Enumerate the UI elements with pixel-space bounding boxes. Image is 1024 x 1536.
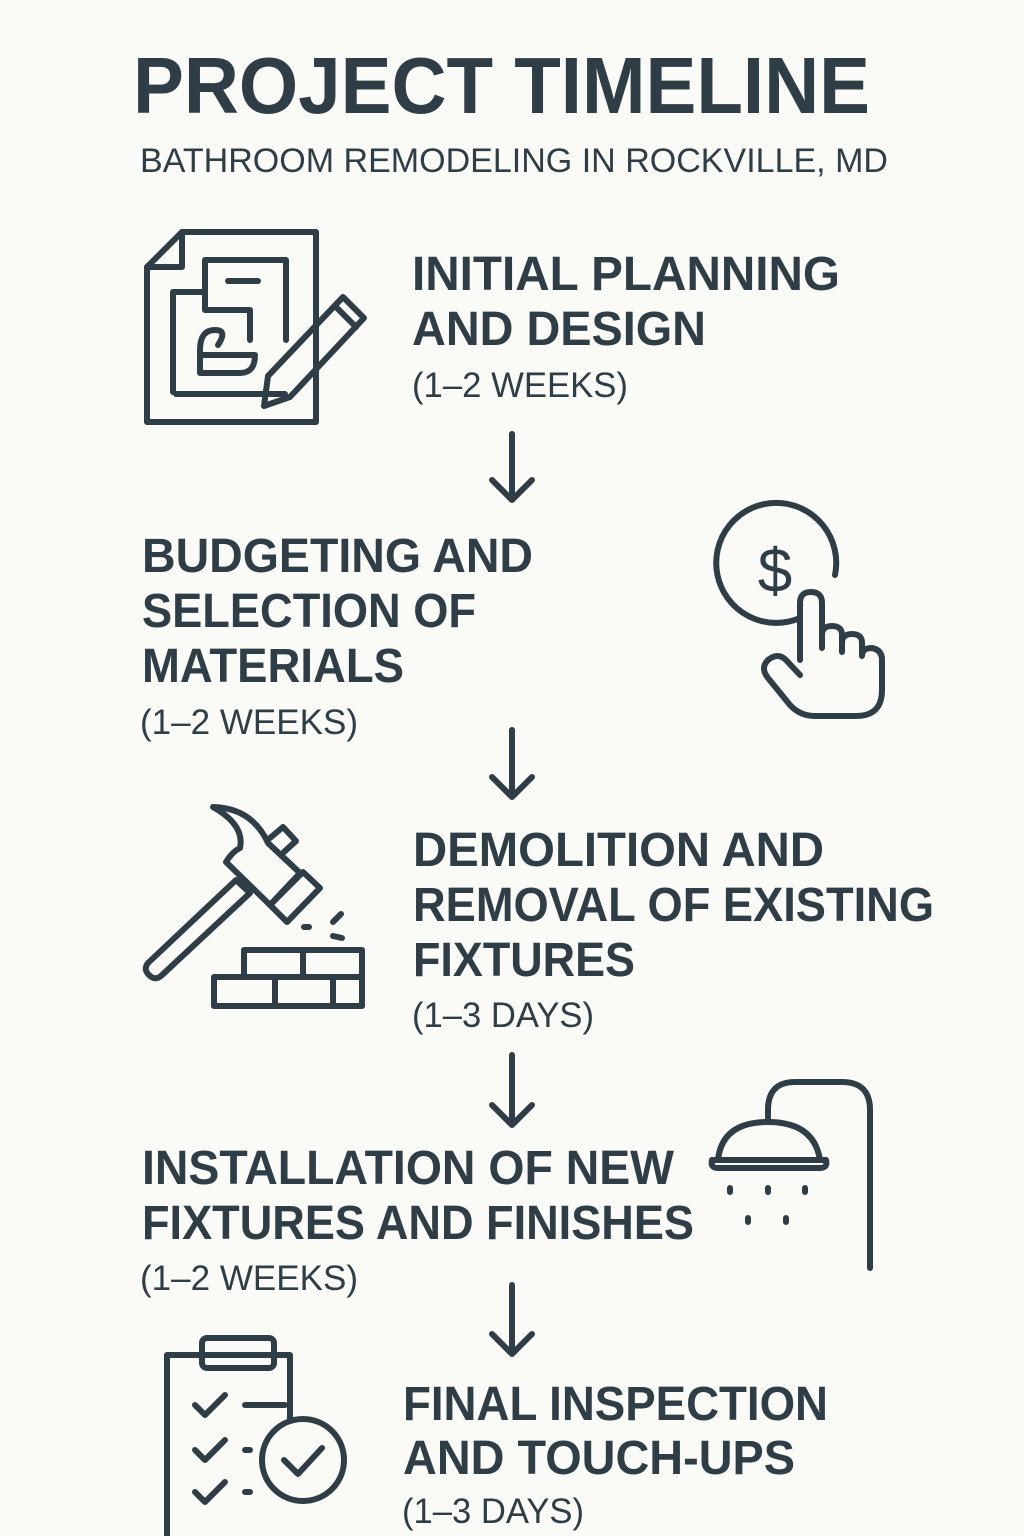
heading: step 1: AND DESIGN [412, 303, 706, 356]
heading: step 2: SELECTION OF [142, 585, 476, 638]
arrow 3 [492, 1055, 532, 1125]
heading: step 4: INSTALLATION OF NEW [142, 1142, 675, 1195]
arrow 1 [492, 434, 532, 500]
heading: step 1 [412, 248, 840, 405]
heading: step 4: FIXTURES AND FINISHES [142, 1197, 694, 1250]
subtitle: BATHROOM REMODELING IN ROCKVILLE, MD [140, 142, 888, 180]
heading: step 5: FINAL INSPECTION [403, 1378, 828, 1431]
arrow 2 [492, 730, 532, 797]
heading: step 5: (1–3 DAYS) [402, 1492, 584, 1531]
heading: step 5: AND TOUCH-UPS [403, 1432, 795, 1485]
heading: step 2 [140, 530, 533, 742]
heading: step 4 [140, 1142, 694, 1298]
heading: step 3 [412, 824, 934, 1035]
icon: shower [712, 1082, 870, 1268]
heading: step 4: (1–2 WEEKS) [140, 1259, 358, 1298]
title: PROJECT TIMELINE [133, 41, 870, 130]
heading: step 2: MATERIALS [142, 640, 404, 693]
heading: step 3: (1–3 DAYS) [412, 996, 594, 1035]
heading: step 1: (1–2 WEEKS) [412, 366, 628, 405]
heading: step 2: (1–2 WEEKS) [140, 703, 358, 742]
heading: step 2: BUDGETING AND [142, 530, 533, 583]
icon: clipboard checklist [167, 1338, 344, 1536]
icon: hammer and bricks [146, 807, 362, 1006]
heading: step 3: REMOVAL OF EXISTING [413, 879, 934, 932]
icon: dollar with hand [716, 503, 882, 716]
heading: step 5 [402, 1378, 828, 1531]
heading: step 1: INITIAL PLANNING [412, 248, 840, 301]
heading: step 3: FIXTURES [413, 934, 635, 987]
arrow 4 [492, 1285, 532, 1354]
icon: dollar with hand: $ [758, 537, 792, 606]
heading: step 3: DEMOLITION AND [413, 824, 824, 877]
icon: planning document with pencil [147, 232, 364, 422]
